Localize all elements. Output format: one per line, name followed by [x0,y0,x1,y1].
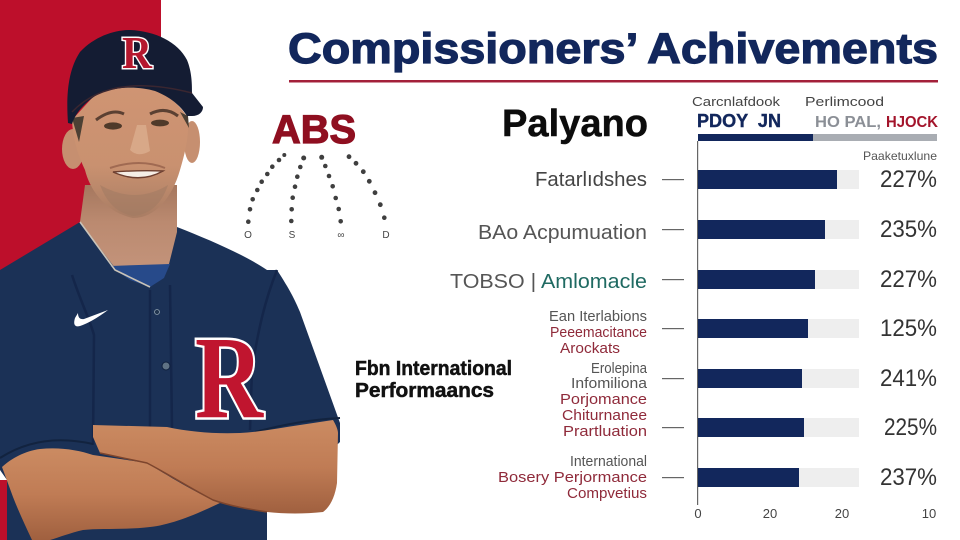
chart header: Paaketuxlune [863,149,937,163]
face [72,87,188,218]
row 4: Arockats [560,340,620,357]
chart header: HO PAL, [815,114,881,131]
chart axis [694,141,936,521]
row 2 [478,216,937,244]
chart axis: 20 [763,506,777,521]
swoosh [74,310,108,326]
row 5: 241% [880,365,937,392]
row 4: Ean Iterlabions [549,308,647,325]
chart header: PDOY JN [697,111,781,131]
row 6 [562,407,937,441]
row 3 [450,266,937,293]
title rule [289,80,938,82]
chart header: Carcnlafdook [692,94,781,109]
jersey logo: R [195,312,264,443]
dotted arc chart [244,153,390,241]
chart axis: 0 [694,506,702,521]
neck [80,185,177,268]
crossed arms [2,448,220,540]
heading: ABS: ABS [272,108,356,152]
title: Compissioners’ Achivements [288,25,938,73]
cap logo: R [122,27,153,78]
dotted arc chart: ∞ [337,230,345,241]
row 7: International [570,453,647,470]
ears [62,129,84,169]
row 1: Fatarlıdshes [535,169,647,191]
row 5 [560,360,937,408]
row 7: Compvetius [567,485,647,502]
buttons [162,362,170,370]
dotted arc chart: O [244,230,252,241]
side heading: Performaancs [355,380,494,402]
chart header [692,94,938,163]
chart axis: 10 [922,506,936,521]
row 5: Infomiliona [571,375,648,392]
row 7: 237% [880,464,937,491]
row 4 [549,308,937,357]
row 4: 125% [880,315,937,342]
row 2: 235% [880,216,937,243]
dotted arc chart: D [382,230,390,241]
side heading: Fbn International [355,358,512,380]
row 3: 227% [880,266,937,293]
chart header: Perlimcood [805,94,884,109]
row 6: Prartluation [563,423,647,440]
side heading [355,358,512,402]
heading: Palyano: Palyano [502,103,648,145]
eyes and brows [96,110,178,120]
row 1: 227% [880,166,937,193]
row 6: Chiturnanee [562,407,647,424]
chart header: HJOCK [886,114,938,131]
cap [67,30,203,124]
jersey [0,222,340,540]
panel: red background [0,0,161,540]
player photo illustration [0,27,340,540]
row 1 [535,166,937,193]
row 3: TOBSO | Amlomacle [450,271,647,293]
smile [113,171,163,178]
row 4: Peeemacitance [550,324,647,341]
row 2: BAo Acpumuation [478,222,647,244]
row 6: 225% [884,414,937,441]
row 7 [498,453,937,502]
chart axis: 20 [835,506,849,521]
row 5: Porjomance [560,391,647,408]
dotted arc chart: S [289,230,296,241]
row 7: Bosery Perjormance [498,469,647,486]
row 5: Erolepina [591,360,648,377]
